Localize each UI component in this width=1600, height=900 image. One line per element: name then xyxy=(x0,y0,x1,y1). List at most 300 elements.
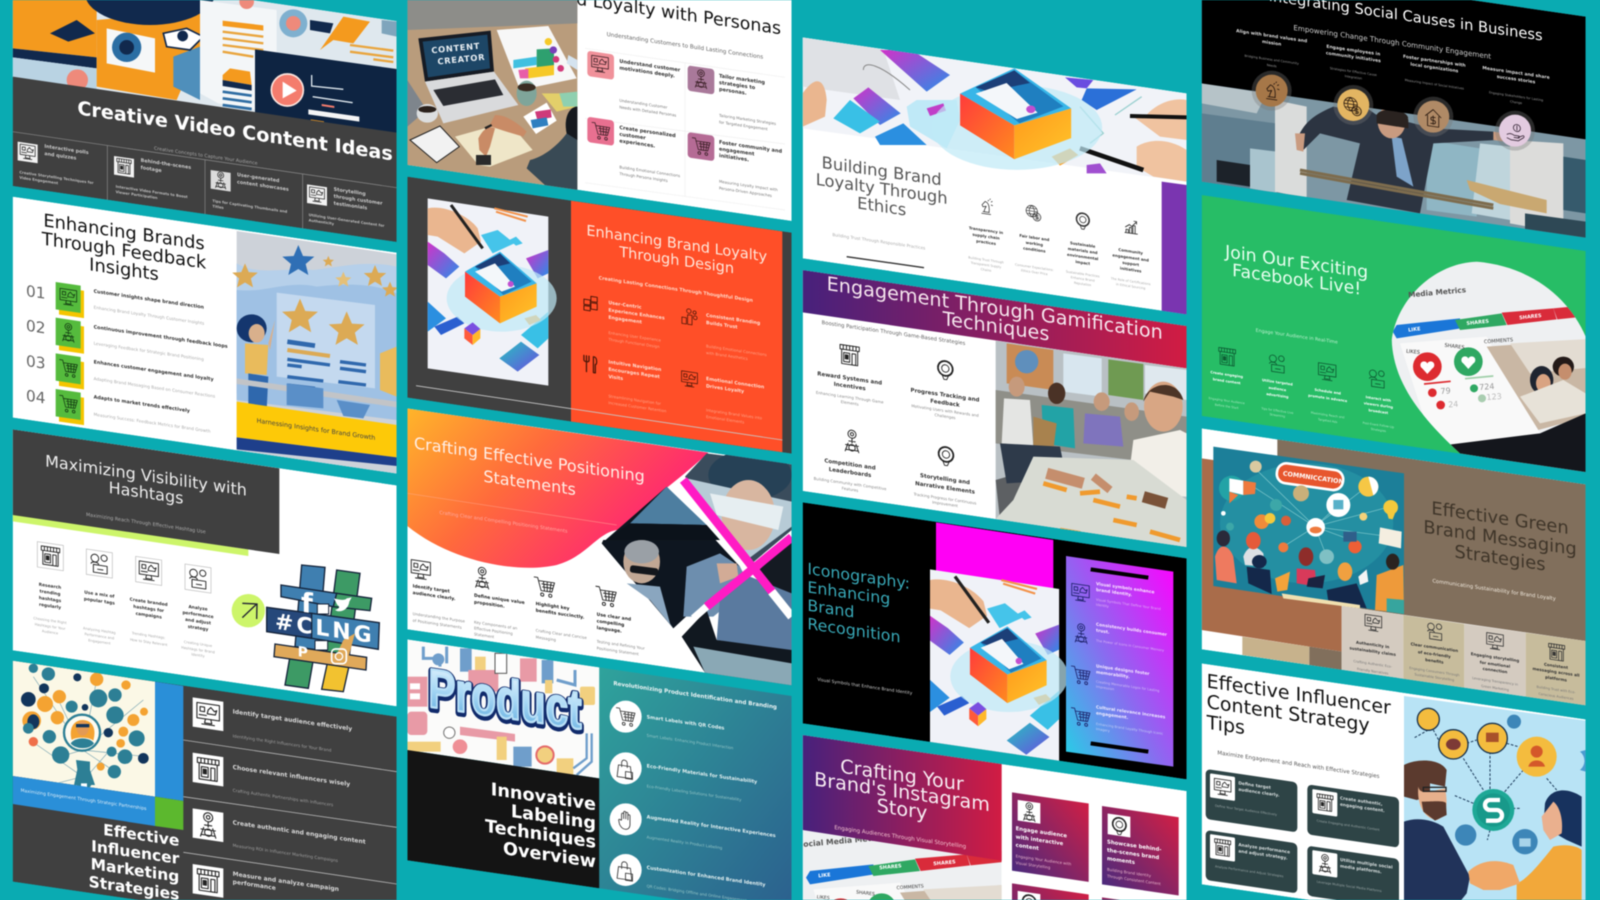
title: Brand Messaging xyxy=(1423,517,1577,560)
item: behind the scenes: Interactive Video Formats to Boost xyxy=(116,185,188,199)
card: community: engagement xyxy=(719,146,755,158)
item: storytelling: Utilizing User-Generated Content for xyxy=(309,213,385,228)
item: identify xyxy=(411,560,466,630)
step: analyze: Hashtags for Brand xyxy=(181,646,215,654)
metric labels: 123 xyxy=(1486,392,1502,402)
step: research: Audience xyxy=(42,629,58,636)
item: consistent branding: Builds Trust xyxy=(706,320,738,331)
step: mix tags: Analyzing Hashtag xyxy=(83,626,116,635)
title: Creative Video Content Ideas xyxy=(77,96,393,165)
list item 04: 04 xyxy=(26,387,46,407)
card: tailor xyxy=(688,65,776,133)
item: schedule: Schedule and xyxy=(1314,388,1341,396)
photo: content creator desk xyxy=(407,0,577,192)
item: reward systems: Incentives xyxy=(834,382,866,392)
column: clear communication: Clear communication xyxy=(1411,641,1458,653)
item: navigation: Intuitive Navigation xyxy=(608,359,662,373)
item: fair labor: Consumer Expectations: xyxy=(1015,263,1054,272)
list item 02 xyxy=(26,317,228,362)
column: authenticity: Authenticity in xyxy=(1356,640,1389,649)
row: cultural relevance: Enhancing Brand Loyalty Through Iconic xyxy=(1096,722,1163,736)
blue frame xyxy=(155,682,183,801)
item: highlight: benefits succinctly. xyxy=(536,608,585,621)
item: community: initiatives xyxy=(1120,265,1142,274)
tan block xyxy=(1242,637,1309,665)
card: lower cards xyxy=(1012,883,1179,900)
item: identify: Understanding the Purpose xyxy=(413,611,466,624)
panel: Building Brand Loyalty with Personas xyxy=(407,0,792,221)
card: tailor: personas. xyxy=(719,87,747,97)
item: community xyxy=(1110,220,1151,291)
item: user generated: User-generated xyxy=(237,172,280,184)
metric labels: 724 xyxy=(1479,382,1495,392)
item: fair labor: conditions xyxy=(1023,245,1046,254)
item: identify: of Positioning Statements xyxy=(413,618,462,630)
row: cultural relevance xyxy=(1071,704,1166,741)
item: user generated: Titles xyxy=(212,204,225,210)
gradient list panel xyxy=(1066,556,1173,767)
card: community xyxy=(688,132,782,199)
card: multiple platforms: Leverage Multiple Social Media Platforms xyxy=(1317,880,1382,893)
item: sustainable: Sustainable Practices xyxy=(1066,270,1100,279)
item: transparency: Transparency in xyxy=(969,225,1003,235)
item: storytelling xyxy=(913,446,976,511)
step: branded: hashtags for xyxy=(133,604,165,614)
card: engage audience: Engage audience xyxy=(1016,826,1067,840)
gradient list panel xyxy=(599,667,792,900)
subtitle: Empowering Change Through Community Engagement xyxy=(1293,23,1491,61)
item: interact: broadcast xyxy=(1369,408,1388,415)
item: user-centric: Engagement xyxy=(608,315,643,326)
item: storytelling: Authenticity xyxy=(309,218,335,226)
column: storytelling: Green Marketing xyxy=(1481,684,1509,692)
photo: social metrics xyxy=(780,796,1047,900)
step: analyze: and adjust xyxy=(185,617,211,627)
item: progress tracking xyxy=(911,360,980,424)
card: tailor: Tailoring Marketing Strategies xyxy=(718,113,776,126)
item: define: Effective Positioning xyxy=(474,625,513,636)
step: mix tags: Use a mix of xyxy=(84,589,114,600)
metric labels: Media Metrics xyxy=(1408,285,1467,299)
step: analyze: strategy xyxy=(188,624,208,633)
row: authentic content: Create authentic and engaging content xyxy=(233,819,366,846)
row: augmented reality: Augmented Reality for Interactive Experiences xyxy=(647,814,776,839)
hashtag logo xyxy=(267,565,379,692)
illustration: team communication xyxy=(1213,447,1404,614)
item: transparency: practices xyxy=(976,238,997,246)
black header xyxy=(1202,0,1586,139)
row: measure performance xyxy=(193,864,339,900)
row: augmented reality xyxy=(610,803,776,850)
item: consistent branding xyxy=(682,308,767,364)
step: branded: How to Stay Relevant xyxy=(130,638,168,647)
column: measure: Change xyxy=(1510,99,1522,105)
item: progress tracking: Motivating Users with Rewards and xyxy=(911,403,979,418)
panel: Engagement Through Gamification Techniques xyxy=(803,270,1187,548)
card: behind the scenes: moments xyxy=(1107,856,1135,866)
step: mix tags: Performance and xyxy=(84,632,114,640)
card: engage audience xyxy=(1012,792,1089,882)
illustration: isometric header xyxy=(803,37,1187,182)
card: personalized: customer xyxy=(619,132,646,142)
column: employees: Engage employees in xyxy=(1326,44,1380,58)
row: identify audience xyxy=(193,697,352,753)
card: analyze: Analyze performance xyxy=(1238,842,1290,856)
column: consistency: Building Trust with Eco- xyxy=(1536,685,1576,695)
item: user generated xyxy=(211,170,289,219)
subtitle: Building Trust Through Responsible Practices xyxy=(832,232,925,251)
list item 04: Adapts to market trends effectively xyxy=(94,394,191,414)
column: storytelling: for emotional xyxy=(1480,659,1511,669)
card: personalized: Create personalized xyxy=(619,125,676,139)
card: authentic content: Create authentic, xyxy=(1340,795,1383,808)
card: tailor: Tailor marketing xyxy=(719,73,765,86)
metric labels: 24 xyxy=(1448,400,1459,409)
item: community: in Ethical Sourcing xyxy=(1116,282,1145,290)
subtitle: Maximizing Reach Through Effective Hashtag Use xyxy=(86,512,206,535)
subtitle: Engage Your Audience in Real-Time xyxy=(1256,328,1338,346)
subtitle: Creating Lasting Connections Through Thoughtful Design xyxy=(599,275,754,304)
step: analyze: Creating Unique xyxy=(184,640,212,648)
item: sustainable: Sustainable xyxy=(1070,240,1096,249)
item: storytelling: Storytelling xyxy=(334,187,366,197)
gradient header xyxy=(803,270,1187,368)
metric labels: COMMENTS xyxy=(1484,337,1513,345)
column: employees: Integration xyxy=(1345,74,1362,81)
item: interactive polls xyxy=(18,142,94,191)
item: highlight: Crafting Clear and Concise xyxy=(536,628,587,640)
item: storytelling: Improvement xyxy=(932,499,958,508)
column: partnerships: local organizations xyxy=(1410,62,1459,75)
card: authentic content: engaging content. xyxy=(1340,802,1385,814)
item: competition: Building Community with Competitive xyxy=(814,476,887,491)
step: research: Choosing the Right xyxy=(33,616,67,625)
item: storytelling: Narrative Elements xyxy=(915,481,976,496)
row: smart labels: Smart Labels with QR Codes xyxy=(647,714,724,732)
panel: Creative Video Content Ideas xyxy=(13,0,397,242)
title: Insights xyxy=(89,254,159,285)
row: cultural relevance: Cultural relevance increases xyxy=(1096,704,1166,721)
item: storytelling: Storytelling and xyxy=(920,473,970,486)
metric labels: LIKE xyxy=(1408,326,1421,334)
item: community: support xyxy=(1122,260,1139,267)
panel: Engagement Through Gamification Techniques: Techniques xyxy=(942,307,1049,346)
item: competition xyxy=(814,429,887,497)
item: content: Engaging Your Audience xyxy=(1209,396,1245,405)
row: visual symbols: Visual Symbols That Define Your Brand xyxy=(1096,598,1161,611)
item: interactive polls: Interactive polls xyxy=(44,144,89,156)
Product wordmark xyxy=(428,657,582,743)
panel: Join Our Exciting Facebook Live xyxy=(1202,195,1600,503)
row: measure performance: performance xyxy=(233,879,276,892)
row: customization xyxy=(610,854,766,900)
panel: Enhancing Brand Loyalty Through Design xyxy=(407,177,792,454)
row: visual symbols: Visual symbols enhance xyxy=(1096,581,1154,596)
column: clear communication: benefits xyxy=(1425,657,1444,665)
title: Brand's Instagram xyxy=(814,768,990,816)
metric labels: LIKES xyxy=(1406,349,1420,356)
header band xyxy=(13,429,279,554)
row: smart labels: Smart Labels: Enhancing Product Interaction xyxy=(647,733,734,750)
title: Enhancing Brand Loyalty xyxy=(586,222,767,266)
subtitle: Understanding Customers to Build Lasting Connections xyxy=(607,32,763,61)
card: tailor: for Targeted Engagement xyxy=(719,119,768,132)
list item 03: Enhances customer engagement and loyalty xyxy=(94,359,214,383)
purple strip xyxy=(1162,182,1187,315)
row: cultural relevance: Imagery xyxy=(1096,727,1110,733)
item: behind the scenes: footage xyxy=(141,165,162,174)
item: identify: audience clearly. xyxy=(413,590,456,602)
row: customization: Customization for Enhanced Brand Identity xyxy=(647,865,766,888)
panel: Iconography Enhancing Brand Recognition xyxy=(803,502,1187,779)
item: navigation: Streamlining Navigation for xyxy=(608,393,661,406)
item: highlight: Highlight key xyxy=(536,601,569,612)
card: motivations xyxy=(587,51,681,118)
list item 01: Customer insights shape brand direction xyxy=(94,289,205,311)
title: Enhancing Brands xyxy=(43,210,205,255)
item: content: Create engaging xyxy=(1210,370,1243,379)
title: Hashtags xyxy=(109,478,183,508)
metric labels: SHARES xyxy=(1466,319,1490,327)
item: user generated: content showcases xyxy=(237,179,289,193)
item: advertising: Utilize targeted xyxy=(1262,378,1293,387)
title: Content Strategy xyxy=(1207,690,1370,737)
item: language: Testing and Refining Your xyxy=(596,639,645,651)
item: identify: Identify target xyxy=(413,583,451,595)
item: transparency xyxy=(968,198,1004,275)
step: mix tags xyxy=(83,549,116,646)
magenta block xyxy=(936,522,1053,590)
column: partnerships xyxy=(1403,54,1466,137)
card: motivations: Needs with Detailed Personas xyxy=(619,104,676,118)
column: authenticity: Friendly Narratives xyxy=(1357,667,1389,676)
column: consistency: messaging across all xyxy=(1532,666,1580,678)
item: competition: Features xyxy=(842,485,858,493)
item: emotional connection: Drives Loyalty xyxy=(706,383,745,395)
item: reward systems: Reward Systems and xyxy=(817,371,882,387)
column: storytelling: connection xyxy=(1483,666,1508,674)
list item 03: Adapting Brand Messaging Based on Consumer Reactions xyxy=(94,376,215,399)
card: personalized: Building Emotional Connections xyxy=(619,164,680,178)
title: Through Feedback xyxy=(41,229,207,274)
column: measure xyxy=(1482,65,1550,151)
item: highlight: Messaging xyxy=(536,634,557,642)
item: language: compelling xyxy=(597,618,624,628)
card: behind the scenes: Building Brand Identity xyxy=(1107,867,1152,878)
column: authenticity xyxy=(1342,606,1403,680)
item: reward systems: Elements xyxy=(841,399,859,407)
item: language xyxy=(596,586,645,657)
row: visual symbols xyxy=(1072,581,1161,616)
column: align: Needs xyxy=(1267,63,1277,68)
subtitle: Boosting Participation Through Game-Based Strategies xyxy=(822,320,966,347)
taupe title block xyxy=(1277,439,1586,641)
card: analyze xyxy=(1206,830,1297,893)
item: community: The Role of Certifications xyxy=(1110,276,1151,286)
row: authentic content: Measuring ROI in Influencer Marketing Campaigns xyxy=(233,843,338,863)
item: interact xyxy=(1363,369,1394,434)
card: behind the scenes: the-scenes brand xyxy=(1107,848,1159,861)
row: smart labels xyxy=(610,701,734,750)
row: eco materials xyxy=(610,752,758,802)
card: motivations: motivations deeply. xyxy=(619,65,675,79)
item: user generated: Tips for Captivating Thumbnails and xyxy=(212,199,288,214)
card: authentic content: Create Engaging and Authentic Content xyxy=(1317,819,1380,832)
row: unique designs: Impression xyxy=(1096,685,1114,691)
list item 03 xyxy=(26,352,215,399)
item: user-centric: Experience Enhances xyxy=(608,307,665,322)
title: Labeling xyxy=(511,802,596,834)
Product wordmark: Product xyxy=(428,657,582,741)
gradient header xyxy=(803,735,1002,861)
illustration: influencer network xyxy=(13,661,155,797)
list heading: Revolutionizing Product Identification and Branding xyxy=(613,681,777,711)
step: branded: Trending Hashtags: xyxy=(131,631,165,640)
item: interact: Strategies xyxy=(1371,427,1386,433)
black title block xyxy=(407,750,599,888)
title: Brand xyxy=(807,596,854,622)
step: branded: Create branded xyxy=(130,597,168,608)
illustration: isometric box xyxy=(428,198,557,386)
list item 04: Measuring Success: Feedback Metrics for Brand Growth xyxy=(94,412,211,434)
metric labels: SHARES xyxy=(933,859,956,867)
item: content xyxy=(1209,347,1245,411)
card: define target: audience clearly. xyxy=(1238,787,1280,799)
card: personalized: Through Persona Insights xyxy=(618,171,668,183)
column: consistency xyxy=(1526,633,1586,707)
subtitle: Creative Concepts to Capture Your Audience xyxy=(154,146,258,167)
row: choose influencers xyxy=(193,753,350,807)
panel: Crafting Your Brand's Instagram Story xyxy=(780,735,1187,900)
list item 01: Enhancing Brand Loyalty Through Customer Insights xyxy=(94,305,204,326)
subtitle: Crafting Clear and Compelling Positioning Statements xyxy=(439,510,568,535)
card: behind the scenes: Through Consistent Content xyxy=(1106,873,1161,886)
title: Join Our Exciting xyxy=(1224,242,1368,283)
item: reward systems xyxy=(816,344,884,410)
card: behind the scenes xyxy=(1102,806,1179,896)
title: Influencer xyxy=(91,837,180,868)
item: emotional connection: Emotional Connection xyxy=(706,376,765,391)
row: consistency: The Power of Icons in Consumer Memory xyxy=(1095,639,1164,653)
panel: Building Brand Loyalty Through Ethics xyxy=(803,37,1187,315)
card: define target xyxy=(1206,769,1297,832)
panel: Effective Green Brand Messaging Strategies xyxy=(1202,428,1586,707)
item: emotional connection: Integrating Brand Values into xyxy=(706,407,763,421)
column: employees: community initiatives xyxy=(1326,50,1381,64)
item: transparency: Building Trust Through xyxy=(968,255,1004,265)
row: identify audience: Identify target audience effectively xyxy=(233,708,352,733)
title: Marketing xyxy=(91,855,179,886)
metric labels xyxy=(816,859,956,900)
title: Loyalty Through xyxy=(816,170,948,208)
title: Innovative xyxy=(491,780,596,815)
card: personalized xyxy=(587,117,680,185)
photo: right diamond collage xyxy=(602,450,792,685)
list item 01 xyxy=(26,282,205,326)
title: Facebook Live! xyxy=(1232,261,1361,300)
title: Through Design xyxy=(618,244,734,277)
row: cultural relevance: engagement. xyxy=(1096,710,1129,721)
column: employees: Strategies for Effective Cause xyxy=(1330,66,1377,77)
card: personalized: experiences. xyxy=(619,138,655,150)
metric labels xyxy=(1406,285,1542,409)
row: eco materials: Eco-Friendly Materials for Sustainability xyxy=(647,763,758,786)
row: consistency: Consistency builds consumer xyxy=(1096,622,1168,638)
item: fair labor: Ethics Over Price xyxy=(1021,268,1048,276)
metric labels: LIKE xyxy=(818,872,831,879)
column: measure: Engaging Stakeholders for Lasting xyxy=(1489,90,1543,102)
item: transparency: Transparent Supply xyxy=(970,261,1001,269)
item: interact: Post-Event Follow-Up xyxy=(1363,421,1394,429)
step: analyze xyxy=(181,564,215,660)
panel: Integrating Social Causes in Business xyxy=(1202,0,1586,239)
item: storytelling: through customer xyxy=(334,194,383,207)
column: authenticity: Crafting Authentic Eco- xyxy=(1353,659,1393,669)
list item 02: Continuous improvement through feedback loops xyxy=(94,324,228,350)
step: branded xyxy=(130,556,168,647)
subtitle: Maximize Engagement and Reach with Effective Strategies xyxy=(1217,750,1380,780)
item: emotional connection: Emotional Elements xyxy=(706,414,744,425)
title: Maximizing Visibility with xyxy=(45,451,247,500)
metric labels: SHARES xyxy=(879,863,902,871)
illustration: star reviews xyxy=(232,231,398,474)
subtitle: Visual Symbols that Enhance Brand Identity xyxy=(817,677,913,697)
orange panel xyxy=(571,201,782,452)
item: user-centric: Enhancing User Experience xyxy=(608,330,661,343)
green block xyxy=(155,797,183,830)
item: storytelling xyxy=(307,184,385,233)
title: Iconography: xyxy=(807,559,910,593)
item: emotional connection xyxy=(682,371,765,427)
column: consistency: Consistent xyxy=(1544,662,1568,670)
column: authenticity: sustainability claims xyxy=(1350,645,1396,657)
laptop label: CONTENT xyxy=(431,41,480,55)
list item 01: 01 xyxy=(26,282,46,303)
item: define: proposition. xyxy=(474,599,505,610)
row: unique designs xyxy=(1071,663,1159,698)
column: align: mission xyxy=(1262,39,1281,48)
item: sustainable xyxy=(1066,212,1100,289)
card: community: Persona-Driven Approaches xyxy=(719,185,772,198)
item: storytelling: testimonials xyxy=(334,201,367,212)
step: analyze: Identity xyxy=(191,652,205,658)
item: content: Before the Start xyxy=(1215,403,1239,410)
item: navigation: Visits xyxy=(608,374,623,382)
title: Recognition xyxy=(807,614,901,647)
metrics heading: Social Media Metrics xyxy=(797,833,887,849)
row: unique designs: memorability. xyxy=(1096,669,1130,680)
item: schedule xyxy=(1308,363,1348,425)
item: navigation: Encourages Repeat xyxy=(608,367,660,380)
panel: Enhancing Brands Through Feedback Insights xyxy=(13,197,398,474)
column: measure: Measure impact and share xyxy=(1482,65,1550,81)
item: user-centric: Through Functional Design xyxy=(607,337,660,349)
item: sustainable: environmental xyxy=(1067,252,1098,261)
item: interact: viewers during xyxy=(1364,401,1393,410)
step: analyze: performance xyxy=(182,610,214,620)
hashtag logo text: f xyxy=(301,588,314,621)
item: content: brand content xyxy=(1213,377,1241,385)
row: eco materials: Eco-Friendly Labeling Solutions for Sustainability xyxy=(647,783,742,802)
title: Crafting Your xyxy=(840,755,964,796)
column: consistency: platforms xyxy=(1545,674,1568,683)
title: Crafting Effective Positioning xyxy=(414,433,645,486)
item: schedule: promote in advance xyxy=(1308,393,1348,403)
item: sustainable: Enhance Brand xyxy=(1071,275,1095,283)
item: consistent branding: with Brand Aesthetics xyxy=(706,350,748,361)
row: choose influencers: Crafting Authentic Partnerships with Influencers xyxy=(233,788,333,807)
row: augmented reality: Augmented Reality in Product Labeling xyxy=(647,834,723,850)
